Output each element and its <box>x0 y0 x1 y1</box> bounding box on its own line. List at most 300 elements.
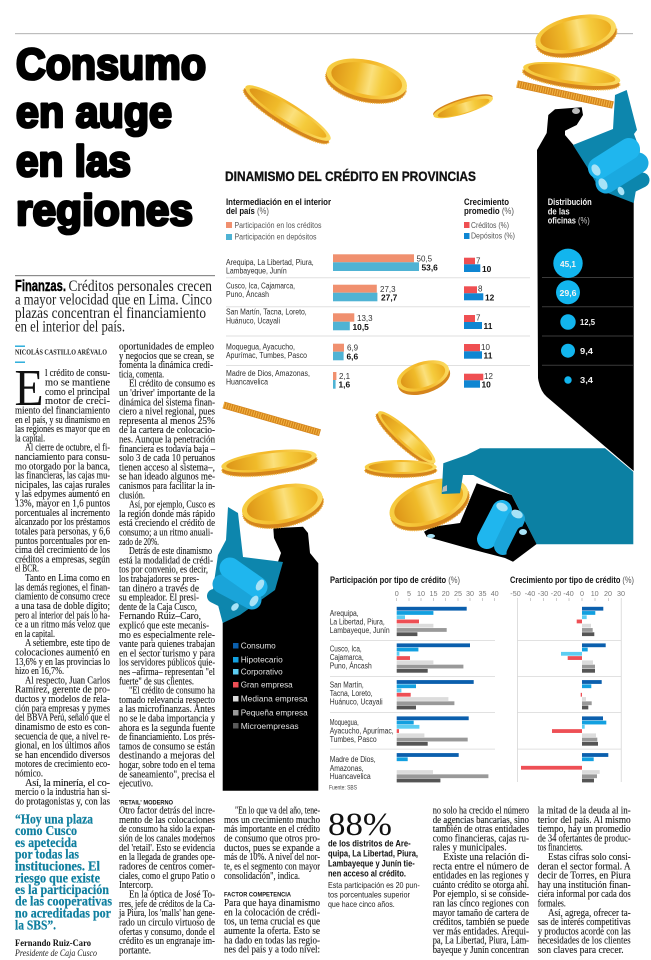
article column 2: su empleador. El presi- <box>119 593 199 604</box>
article column 2, lower: sión de los canales modernos <box>119 834 215 844</box>
pull quote <box>15 812 112 933</box>
intermediation bars: 27,3 <box>380 285 396 294</box>
article column 2, lower: Intercorp. <box>119 880 153 891</box>
article column 1: totales para personas, y 6,6 <box>15 526 110 538</box>
panel: credit growth by type <box>510 575 634 782</box>
deck text <box>15 278 212 336</box>
subheading: factor competencia: FACTOR COMPETENCIA <box>224 892 291 899</box>
article column 5: rales y municipales. <box>433 843 507 854</box>
byline <box>15 346 107 363</box>
quote attribution <box>14 938 97 959</box>
article column 2: ahora es la segunda fuente <box>119 723 215 734</box>
row dividers <box>542 277 634 366</box>
axis labels: 35 <box>478 589 486 598</box>
article column 6: sas de interés competitivas <box>538 917 631 928</box>
article column 5: también de otras entidades <box>433 824 529 835</box>
axis labels: 25 <box>454 589 462 598</box>
region labels: Lambayeque, Junín <box>226 267 287 276</box>
growth bars: 10 <box>481 343 490 352</box>
black fingers <box>424 483 537 562</box>
intermediation header <box>226 197 331 216</box>
intermediation header: del país (%) <box>226 206 269 216</box>
axis labels: -40 <box>563 589 574 598</box>
article column 3: de consumo que otros pro- <box>224 834 320 844</box>
article column 2: mo es especialmente rele- <box>119 630 215 641</box>
coin: flat centre <box>365 460 437 478</box>
article column 3, lower: en la colocación de crédi- <box>224 907 320 918</box>
region labels: Cusco, Ica, <box>330 644 362 654</box>
article column 1: Al cierre de octubre, el fi- <box>25 443 110 454</box>
article column 1: pero al interior del país lo ha- <box>15 610 110 621</box>
article column 5: cuánto crédito se otorga ahí. <box>433 880 529 891</box>
article column 3: consolidación", indica. <box>224 871 300 882</box>
title: Consumo <box>16 41 206 89</box>
callout: 88% <box>328 807 420 909</box>
credit type legend <box>233 641 308 731</box>
article column 1: puntos porcentuales por en- <box>15 536 110 547</box>
panel: credit dynamism in provinces <box>225 169 530 390</box>
credit type legend: Gran empresa <box>241 680 293 690</box>
article column 3, lower: Para que haya dinamismo <box>224 898 320 909</box>
growth header: promedio (%) <box>464 206 514 216</box>
article column 3: "En lo que va del año, tene- <box>235 806 320 816</box>
growth bars: 7 <box>476 314 481 322</box>
region labels <box>330 609 394 781</box>
callout bold text: quipa, La Libertad, Piura, <box>328 848 418 860</box>
axis labels: 40 <box>491 589 499 598</box>
credit type legend: Mediana empresa <box>241 694 308 704</box>
region labels: La Libertad, Piura, <box>330 618 385 626</box>
article column 2: no se le daba importancia y <box>119 714 216 724</box>
panel heading: distribution of offices: de las <box>548 206 570 216</box>
article column 1: se han encendido diversos <box>15 750 110 761</box>
axis labels: 0 <box>395 589 399 598</box>
article column 2, lower: Otro factor detrás del incre- <box>119 806 215 816</box>
article column 5: entidades en las regiones y <box>433 871 530 882</box>
article column 2, lower <box>118 806 215 956</box>
growth bars <box>464 256 495 390</box>
growth legend: Créditos (%) <box>471 221 509 230</box>
article column 2: canismos para facilitar la in- <box>119 481 215 492</box>
article column 3: mos un crecimiento mucho <box>224 815 320 826</box>
article column 5: Por ejemplo, si se conside- <box>433 889 529 900</box>
pull quote: como Cusco <box>15 824 77 839</box>
deck text: a mayor velocidad que en Lima. Cinco <box>15 292 212 308</box>
deck text: plazas concentran el financiamiento <box>15 305 206 322</box>
article column 1: ductos y modelos de rela- <box>15 694 110 705</box>
growth legend <box>464 221 515 241</box>
article column 2: está creciendo el crédito de <box>119 518 215 529</box>
pull quote: es apetecida <box>15 836 77 851</box>
callout note: Esta participación es 20 pun- <box>328 880 420 890</box>
article column 2, lower: ciales, como el grupo Patio o <box>119 871 215 882</box>
pull quote: la SBS”. <box>15 918 56 933</box>
article column 5: recta entre el número de <box>433 861 529 872</box>
credit type legend: Pequeña empresa <box>241 707 308 717</box>
coin: over regional table <box>393 354 454 401</box>
article column 3, lower: tos, un tema crucial es que <box>224 917 320 928</box>
article column 6: la mitad de la deuda al in- <box>538 806 631 816</box>
axis labels: 5 <box>407 589 411 598</box>
article column 1: la capital. <box>15 433 45 444</box>
coin: edge strip centre left <box>224 405 320 433</box>
teal thumb and palm <box>212 507 283 623</box>
axis labels: 20 <box>604 589 612 598</box>
article column 1: hizo en 16,7%. <box>15 666 64 677</box>
article column 2: dinámica del sistema finan- <box>119 397 215 408</box>
panel: credit share by type <box>329 575 499 792</box>
pull quote: es la participación <box>15 883 109 898</box>
bubble chart: 12,5 <box>580 317 595 327</box>
article column 1: motores de crecimiento eco- <box>15 759 110 770</box>
coin: top right <box>532 8 620 64</box>
article column 2: tamos de consumo se están <box>119 741 216 752</box>
source: Fuente: SBS <box>329 784 357 792</box>
article column 5: créditos, también se puede <box>433 917 529 928</box>
region labels: Arequipa, La Libertad, Piura, <box>226 258 314 267</box>
article column 1: las financieras, las cajas mu- <box>15 471 110 482</box>
article column 2: dente de la Caja Cusco, <box>119 602 197 613</box>
intermediation bars <box>333 254 438 390</box>
quote attribution: Fernando Ruiz-Caro <box>15 938 91 949</box>
deck text: Créditos personales crecen <box>68 278 212 295</box>
growth bars: 11 <box>484 350 493 360</box>
intermediation legend <box>226 221 322 242</box>
intermediation legend: Participación en depósitos <box>234 233 316 242</box>
region labels: Puno, Áncash <box>330 662 372 670</box>
article column 2: los servidores públicos quie- <box>119 658 215 669</box>
axis labels: 10 <box>591 589 599 598</box>
article column 2: destinando a mejoras del <box>119 751 215 762</box>
article column 6 <box>538 806 631 956</box>
article column 1: A setiembre, este tipo de <box>25 638 110 649</box>
article column 2: oportunidades de empleo <box>119 342 214 352</box>
coin: top centre <box>322 52 411 110</box>
panel heading: distribution of offices <box>548 197 592 226</box>
region labels: Cajamarca, <box>330 653 364 662</box>
axis labels: 30 <box>466 589 474 598</box>
article column 2: en el sector turismo y para <box>119 648 215 659</box>
article column 2: financiera es todavía baja – <box>119 444 216 455</box>
intermediation bars: 50,5 <box>416 254 433 264</box>
article column 2: nes. Aunque la penetración <box>119 434 216 446</box>
region labels: Tumbes, Pasco <box>330 735 377 744</box>
article column 6: Estas cifras solo consi- <box>548 852 631 863</box>
intermediation header: Intermediación en el interior <box>226 197 331 207</box>
article column 5: ran las cinco regiones con <box>433 898 530 910</box>
bubble chart: 29,6 <box>560 288 577 298</box>
article column 2: Así, por ejemplo, Cusco es <box>129 500 215 511</box>
article column 2: un 'driver' importante de la <box>119 388 215 399</box>
callout bold text <box>328 838 418 880</box>
article column 2: explicó que este mecanis- <box>119 620 209 632</box>
region labels: Moquegua, <box>330 718 359 727</box>
intermediation bars: 13,3 <box>357 314 373 323</box>
region labels: Ayacucho, Apurímac, <box>330 726 394 736</box>
axis labels <box>395 589 499 598</box>
article column 1: miento del financiamiento <box>15 405 110 416</box>
article column 1: do protagonistas y, con las <box>15 796 110 808</box>
byline: NICOLÁS CASTILLO ARÉVALO <box>15 349 107 357</box>
intermediation bars: 6,6 <box>346 352 358 362</box>
pull quote: por todas las <box>15 848 79 863</box>
panel heading: distribution of offices: oficinas (%) <box>548 216 590 226</box>
intermediation bars: 2,1 <box>339 372 351 381</box>
article column 2: de la cartera de colocacio- <box>119 425 215 436</box>
article column 6: tos financieros. <box>538 843 583 854</box>
coin: flat, second top right <box>521 57 622 95</box>
article column 1: l crédito de consu- <box>45 368 110 379</box>
article column 1: porcentuales al incremento <box>15 508 110 519</box>
article column 3 <box>224 806 320 882</box>
article column 1: créditos a empresas, según <box>15 554 111 565</box>
article column 6: son claves para crecer. <box>538 945 624 956</box>
article column 2: tos por convenio, es decir, <box>119 565 208 576</box>
article column 1: 13%, mayor en 1,6 puntos <box>15 498 110 510</box>
article column 2: ejecutivo. <box>119 779 153 790</box>
growth header: Crecimiento <box>464 197 509 207</box>
panel: bottom-right blue hand <box>383 448 633 562</box>
quote attribution: Presidente de Caja Cusco <box>14 948 97 959</box>
article column 2: los trabajadores se pres- <box>119 574 199 585</box>
article column 1: nómico. <box>15 768 43 780</box>
big number: 88% <box>328 807 392 843</box>
article column 2: de financiamiento. Los prés- <box>119 732 215 743</box>
article column 1: colocaciones aumentó en <box>15 648 111 658</box>
title underline <box>15 275 215 276</box>
title: en las <box>16 138 131 186</box>
article column 2: está la modalidad de crédi- <box>119 555 213 566</box>
light fingers <box>487 510 502 539</box>
black arm <box>223 527 318 791</box>
credit type legend: Consumo <box>241 641 276 651</box>
black arm shape <box>537 107 634 471</box>
bubble chart: 45,1 <box>560 259 576 269</box>
region labels: Cusco, Ica, Cajamarca, <box>226 281 295 290</box>
growth bars: 10 <box>482 380 491 390</box>
article column 3, lower: nes del país y a todo nivel: <box>224 945 320 956</box>
article column 2, lower: del 'retail'. Esto se evidencia <box>119 843 215 854</box>
region labels: Apurímac, Tumbes, Pasco <box>226 351 307 360</box>
article column 3, lower: ha dado en todas las regio- <box>224 935 320 946</box>
region labels: Huancavelica <box>330 772 371 781</box>
article column 2: nes –afirma– representan "el <box>119 667 215 678</box>
bubble chart <box>553 249 595 385</box>
article column 6: tiempo, hay un promedio <box>538 824 631 835</box>
region labels: Tacna, Loreto, <box>330 689 373 698</box>
article column 6: decir de Torres, en Piura <box>538 871 631 882</box>
article column 1: y las edpymes aumentó en <box>15 489 111 500</box>
axis labels: -50 <box>510 589 521 598</box>
intermediation bars: 1,6 <box>338 380 350 390</box>
article column 1: dinamismo de esto es con- <box>15 722 110 733</box>
article column 1: gional, en los últimos años <box>15 741 110 752</box>
article column 2: se han ideado algunos me- <box>119 472 215 483</box>
pull quote: instituciones. El <box>15 860 100 875</box>
article column 6: Así, agrega, ofrecer ta- <box>548 908 631 919</box>
axis labels: -20 <box>551 589 561 598</box>
callout bold text: nen acceso al crédito. <box>328 868 406 880</box>
article column 5: ver más entidades. Arequi- <box>433 926 529 937</box>
article column 3, lower <box>224 898 320 956</box>
article column 2 <box>119 342 216 790</box>
region labels: Madre de Dios, Amazonas, <box>226 369 310 378</box>
article column 1: mercio o la industria han si- <box>15 787 110 798</box>
article column 1: Así, la minería, el co- <box>25 778 111 789</box>
region labels: Madre de Dios, <box>330 755 376 764</box>
region labels: Moquegua, Ayacucho, <box>226 342 295 351</box>
deck text: Finanzas. <box>15 278 66 295</box>
article column 1: a una tasa de doble dígito; <box>15 601 110 612</box>
article column 2: clusión. <box>119 490 145 501</box>
credit type legend: Hipotecario <box>241 654 283 664</box>
teal sleeve and thumb <box>442 448 633 544</box>
region labels: San Martín, <box>330 680 364 690</box>
article column 1: en la capital. <box>15 629 55 640</box>
coin: tilted centre <box>371 406 440 471</box>
axis labels: 20 <box>442 589 450 598</box>
pull quote: “Hoy una plaza <box>15 812 93 827</box>
article column 1: motor de creci- <box>45 396 111 407</box>
nail on thumb <box>442 485 447 492</box>
article column 2, lower: mento de las colocaciones <box>119 815 215 826</box>
axis labels: 10 <box>417 589 425 598</box>
article column 1: del BBVA Perú, señaló que el <box>15 713 110 724</box>
region labels: Huánuco, Ucayali <box>330 698 383 706</box>
article column 2: consumo; a un ritmo anuali- <box>119 528 213 538</box>
drop cap: E <box>14 360 44 417</box>
region labels: Huancavelica <box>226 377 268 386</box>
article column 3, lower: aumente la oferta. Esto se <box>224 926 320 937</box>
article column 3: más de 10%. A nivel del nor- <box>224 852 320 863</box>
top rule <box>15 33 633 34</box>
axis labels: -30 <box>538 589 548 598</box>
article column 6: necesidades de los clientes <box>538 936 631 947</box>
bar chart: share <box>397 607 488 782</box>
article column 1: las regiones es mayor que en <box>15 424 111 435</box>
article column 2: fuerte" de sus clientes. <box>119 676 194 687</box>
coin: on lower left hand <box>238 477 327 535</box>
intermediation bars: 6,9 <box>347 344 359 352</box>
growth bars: 12 <box>484 372 493 381</box>
deck text: en el interior del país. <box>15 318 125 336</box>
article column 2, lower: ja Piura, los 'malls' han gene- <box>118 908 215 919</box>
panel: bottom-left hand with legend <box>212 507 318 791</box>
bubble chart: 3,4 <box>580 375 593 385</box>
credit type legend: Microempresas <box>241 721 299 731</box>
callout bold text: Lambayeque y Junín tie- <box>328 858 415 870</box>
article column 1: secuencia de que, a nivel re- <box>15 731 110 742</box>
callout note: tos porcentuales superior <box>328 890 410 900</box>
article column 1: como el principal <box>45 387 110 398</box>
light fingers <box>214 596 236 607</box>
region labels: Puno, Áncash <box>226 290 269 299</box>
article column 5: no solo ha crecido el número <box>433 806 529 816</box>
callout bold text: de los distritos de Are- <box>328 838 411 850</box>
intermediation bars: 27,7 <box>381 292 398 302</box>
coin: small tilted <box>431 90 495 123</box>
growth bars: 12 <box>485 292 495 302</box>
article column 2: tan dinero a través de <box>119 583 199 594</box>
axis labels: -40 <box>525 589 535 598</box>
title: en auge <box>16 89 172 137</box>
article column 1: mo otorgado por la banca, <box>15 461 110 472</box>
article column 2: y negocios que se crean, se <box>119 351 214 362</box>
article column 2, lower: portante. <box>119 946 151 956</box>
region labels: San Martín, Tacna, Loreto, <box>226 308 307 317</box>
article column 2, lower: crédito es un engranaje im- <box>119 936 215 947</box>
panel title: DINAMISMO DEL CRÉDITO EN PROVINCIAS <box>225 169 476 184</box>
article column 2, lower: En la óptica de José To- <box>129 890 215 900</box>
article column 2, lower: radores de centros comer- <box>119 862 215 872</box>
growth header <box>464 197 514 216</box>
article column 2: tienen acceso al sistema–, <box>119 462 215 473</box>
article column 1: ciamiento de consumo crece <box>15 592 110 603</box>
bar chart: growth <box>521 607 608 782</box>
article column 2: a las microfinanzas. Antes <box>119 704 215 715</box>
article column 2, lower: ofertas y consumo, donde el <box>119 927 215 938</box>
pull quote: riesgo que existe <box>15 871 100 886</box>
article column 2: solo 3 de cada 10 peruanos <box>119 453 215 464</box>
article column 1: el BCR. <box>15 564 39 575</box>
article column 5: como financieras, cajas ru- <box>433 833 529 844</box>
article column 2: representa al menos 25% <box>119 416 215 427</box>
article column 2: "El crédito de consumo ha <box>129 686 215 697</box>
chart heading: Crecimiento por tipo de crédito (%) <box>510 575 634 585</box>
article column 1: en el país, y su dinamismo en <box>15 415 111 426</box>
article column 1: las demás regiones, el finan- <box>15 582 110 593</box>
credit type legend: Corporativo <box>241 666 283 676</box>
article column 6: y productos acorde con las <box>538 926 631 937</box>
article column 2, lower: en la llegada de grandes ope- <box>119 852 215 863</box>
intermediation bars: 53,6 <box>422 262 438 272</box>
article column 1: ce a un ritmo más veloz que <box>15 620 110 631</box>
article column 2: zado de 20%. <box>119 537 159 548</box>
article column 1 <box>15 368 111 808</box>
bubble chart: 9,4 <box>580 346 593 356</box>
growth bars: 8 <box>478 284 483 294</box>
article column 2: ciero a nivel regional, pues <box>119 407 215 418</box>
callout note <box>328 880 420 909</box>
article column 2: vante para quienes trabajan <box>119 639 216 650</box>
region labels: Lambayeque, Junín <box>330 626 390 635</box>
title: regiones <box>16 187 193 235</box>
article column 6: de 34 ofertantes de produc- <box>538 833 631 844</box>
region labels: Arequipa, <box>330 609 359 618</box>
article column 2: ticia, comenta. <box>119 369 164 380</box>
article column 5: Existe una relación di- <box>443 852 529 863</box>
article column 3: más importante en el crédito <box>224 824 320 835</box>
article column 6: ciera informal por cada dos <box>538 889 631 900</box>
article column 2, lower: de consumo ha sido la expan- <box>119 824 215 835</box>
article column 2: tomado relevancia respecto <box>119 695 215 706</box>
growth legend: Depósitos (%) <box>471 232 515 241</box>
article column 6: formales. <box>538 898 566 910</box>
title <box>16 41 206 235</box>
pull quote: de las cooperativas <box>15 895 112 910</box>
growth bars: 10 <box>482 264 492 274</box>
article column 5: de agencias bancarias, sino <box>433 815 529 826</box>
article column 2: fomenta la dinámica credi- <box>119 360 213 371</box>
article column 6: terior del país. Al mismo <box>538 815 631 826</box>
article column 2, lower: rado un círculo virtuoso de <box>119 918 215 928</box>
coin: flat centre left <box>220 445 318 481</box>
subheading: retail moderno: 'RETAIL' MODERNO <box>119 800 173 806</box>
blue hand, top right <box>572 90 642 203</box>
article column 2: de saneamiento", precisa el <box>119 769 215 780</box>
axis labels <box>510 589 625 598</box>
pull quote: no acreditadas por <box>15 906 111 921</box>
